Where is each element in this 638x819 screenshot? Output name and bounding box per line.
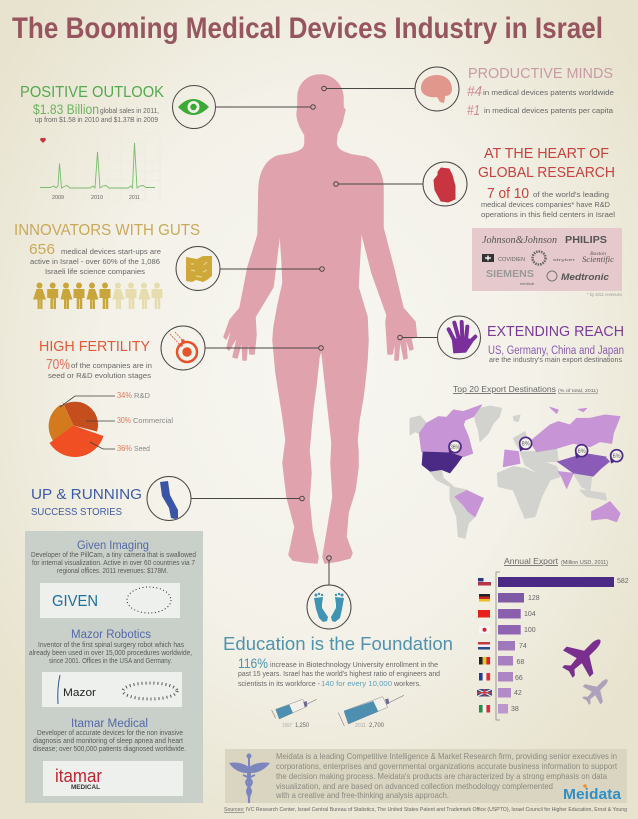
panel: positive outlook: POSITIVE OUTLOOK <box>20 84 165 101</box>
panel: company logos: Johnson&Johnson <box>482 234 557 246</box>
company: Given Imaging: regional offices. 2011 revenues: $178M. <box>57 568 168 575</box>
icon: large plane <box>554 627 613 686</box>
icon: small plane <box>577 671 616 710</box>
company: Mazor Robotics: since 2001. Offices in the USA and Germany. <box>49 658 172 665</box>
heading: up and running: UP & RUNNING <box>31 486 142 503</box>
pie chart: company stages: 36% <box>117 443 132 453</box>
company: Itamar Medical: Itamar Medical <box>71 718 148 730</box>
panel: at the heart of global research: medical devices companies* have R&D <box>481 200 611 209</box>
panel: company logos: PHILIPS <box>565 235 607 246</box>
icon: large syringe, 2011: 2,700 <box>369 722 384 729</box>
line chart: ECG of sales: 2010 <box>91 195 103 201</box>
pie chart: company stages: 34% <box>117 390 132 400</box>
panel: Meidata: the decision making process. Meidata's products are characterized by a strong emphasis on data <box>276 771 607 781</box>
company: Itamar Medical: diagnosis and monitoring of sleep apnea and heart <box>33 738 183 745</box>
panel: company logos: Medtronic <box>561 272 609 282</box>
company: Itamar Medical: itamar <box>55 766 102 786</box>
panel: high fertility: seed or R&D evolution stages <box>48 371 151 380</box>
panel: productive minds: PRODUCTIVE MINDS <box>468 65 613 82</box>
panel: positive outlook: global sales in 2011, <box>100 108 159 115</box>
panel: productive minds: #4 <box>467 83 482 100</box>
panel: positive outlook <box>20 84 165 124</box>
panel: innovators with guts: INNOVATORS WITH GUTS <box>14 222 200 239</box>
company: Given Imaging: GIVEN <box>52 593 98 610</box>
panel: company logos: Scientific <box>582 255 614 264</box>
company: Given Imaging: for internal visualization. Active in over 60 countries via 7 <box>32 560 195 567</box>
company: Mazor Robotics: Inventor of the first spinal surgery robot which has <box>38 642 184 649</box>
icon: small syringe, 1997: 1997 <box>282 723 292 729</box>
panel: positive outlook: $1.83 Billion <box>33 102 99 117</box>
panel: productive minds: in medical devices patents worldwide <box>483 88 614 97</box>
icon: brain <box>415 67 459 111</box>
icon: fertility target <box>161 326 205 370</box>
panel: Meidata: visualization, and are based on advanced collection methodology complemented <box>276 781 553 791</box>
panel: extending reach: EXTENDING REACH <box>487 323 624 340</box>
icon: large syringe, 2011 <box>338 695 404 729</box>
panel: education <box>223 633 453 688</box>
bar chart: annual export: 38 <box>511 706 519 713</box>
icon: leg <box>147 476 191 520</box>
panel: education: scientists in its workforce - <box>238 681 321 688</box>
bar chart: annual export: 582 <box>617 578 629 585</box>
bar chart: annual export: 68 <box>516 659 524 666</box>
panel: company logos <box>472 228 622 291</box>
map pins: 36% <box>450 445 461 451</box>
panel: extending reach <box>487 323 624 364</box>
panel: high fertility: HIGH FERTILITY <box>39 338 150 355</box>
map pins: 6% <box>613 454 621 460</box>
panel: education: 116% <box>238 655 268 671</box>
panel: innovators with guts <box>14 222 200 276</box>
company: Given Imaging <box>31 540 196 618</box>
bar chart: annual export <box>477 556 629 720</box>
bar chart: annual export: 74 <box>519 643 527 650</box>
panel: education: 140 for every 10,000 <box>321 679 392 688</box>
panel: Meidata: corporations, enterprises and governmental organizations accurate business information to support <box>276 761 618 771</box>
connector lines and dots <box>191 86 438 585</box>
panel: at the heart of global research: 7 of 10 <box>487 186 529 202</box>
icon: heart organ <box>423 162 467 206</box>
icon: feet <box>307 585 351 629</box>
bar chart: annual export: 128 <box>528 595 540 602</box>
panel: company logos: COVIDIEN <box>498 257 525 263</box>
map pins: 6% <box>578 449 586 455</box>
pie chart: company stages: R&D <box>134 391 151 400</box>
company: Mazor Robotics: already been used in over 15,000 procedures worldwide, <box>29 650 192 657</box>
pictogram: people <box>33 282 162 309</box>
icon: hand <box>438 316 480 359</box>
company: Mazor Robotics: Mazor <box>63 687 96 699</box>
panel: education: past 15 years. Israel has the world's highest ratio of engineers and <box>238 671 440 678</box>
bar chart: annual export: 100 <box>524 627 536 634</box>
panel: high fertility <box>39 338 152 380</box>
panel: high fertility: 70% <box>46 356 70 373</box>
icon: caduceus <box>229 754 270 803</box>
company: Itamar Medical: MEDICAL <box>71 784 100 791</box>
panel: high fertility: of the companies are in <box>71 361 152 370</box>
pie chart: company stages: Seed <box>134 444 150 453</box>
bar chart: annual export: 104 <box>524 611 536 618</box>
panel: company logos: stryker <box>553 258 577 262</box>
body silhouette <box>224 75 416 563</box>
panel: education: increase in Biotechnology University enrollment in the <box>270 662 438 669</box>
footnote: * by 2011 revenues <box>587 292 623 297</box>
map heading: Top 20 Export Destinations <box>453 384 556 394</box>
map pins <box>448 437 623 464</box>
icon: small syringe, 1997 <box>272 699 317 729</box>
panel: company logos: SIEMENS <box>486 269 534 280</box>
bar chart: annual export: 42 <box>514 690 522 697</box>
panel: at the heart of global research: of the world's leading <box>533 190 609 199</box>
panel: at the heart of global research: AT THE HEART OF <box>484 145 609 162</box>
world map <box>410 405 623 538</box>
icon: large syringe, 2011: 2011 <box>355 723 366 729</box>
panel: innovators with guts: 656 <box>29 241 55 258</box>
map pins: 8% <box>522 442 530 448</box>
bar chart: annual export: 66 <box>515 675 523 682</box>
company: Given Imaging: Given Imaging <box>77 540 149 552</box>
company: Given Imaging: Developer of the PillCam, a tiny camera that is swallowed <box>31 552 196 559</box>
panel: at the heart of global research <box>478 145 615 219</box>
company: Mazor Robotics <box>29 629 192 707</box>
panel: company logos: medical <box>520 282 534 286</box>
company: Itamar Medical: Developer of accurate devices for the non invasive <box>37 730 183 737</box>
panel: at the heart of global research: operations in this field centers in Israel <box>481 210 615 219</box>
panel: productive minds <box>467 65 614 119</box>
panel: productive minds: in medical devices patents per capita <box>484 106 614 115</box>
panel: positive outlook: up from $1.58 in 2010 and $1.37B in 2009 <box>35 117 158 124</box>
bar chart: annual export: Annual Export <box>504 556 559 566</box>
icon: small syringe, 1997: 1,250 <box>295 722 309 729</box>
line chart: ECG of sales: 2011 <box>129 195 140 201</box>
icon: intestines <box>176 246 220 290</box>
panel: innovators with guts: medical devices start-ups are <box>61 247 161 256</box>
line chart: ECG of sales: 2009 <box>52 195 64 201</box>
bar chart: annual export: (Million USD, 2011) <box>561 560 608 566</box>
panel: at the heart of global research: GLOBAL RESEARCH <box>478 164 615 181</box>
panel: education: workers. <box>393 681 421 688</box>
company: Mazor Robotics: Mazor Robotics <box>71 629 151 641</box>
logo: Meidata: Meidata <box>563 786 622 803</box>
pie chart: company stages <box>49 390 173 457</box>
heading: up and running: SUCCESS STORIES <box>31 507 122 518</box>
panel: Meidata: with a creative and free-thinking analysis approach. <box>275 790 449 800</box>
panel: innovators with guts: Israeli life science companies <box>45 267 145 276</box>
panel: innovators with guts: active in Israel - over 60% of the 1,086 <box>30 257 160 266</box>
pie chart: company stages: 30% <box>117 415 131 425</box>
pie chart: company stages: Commercial <box>133 416 173 425</box>
flags <box>477 578 492 712</box>
panel: Meidata <box>225 749 627 803</box>
panel: extending reach: are the industry's main export destinations <box>489 357 623 364</box>
heading: up and running <box>31 486 142 518</box>
panel: success stories <box>25 531 203 803</box>
map heading <box>453 384 599 394</box>
icon: eye <box>172 86 216 128</box>
map heading: (% of total, 2011) <box>558 388 599 393</box>
panel: productive minds: #1 <box>467 102 480 119</box>
line chart: ECG of sales <box>37 133 160 201</box>
company: Itamar Medical: disease; over 500,000 patients diagnosed worldwide. <box>33 746 186 753</box>
panel: company logos: Boston <box>590 251 606 257</box>
company: Itamar Medical <box>33 718 186 796</box>
panel: education: Education is the Foundation <box>223 633 453 654</box>
